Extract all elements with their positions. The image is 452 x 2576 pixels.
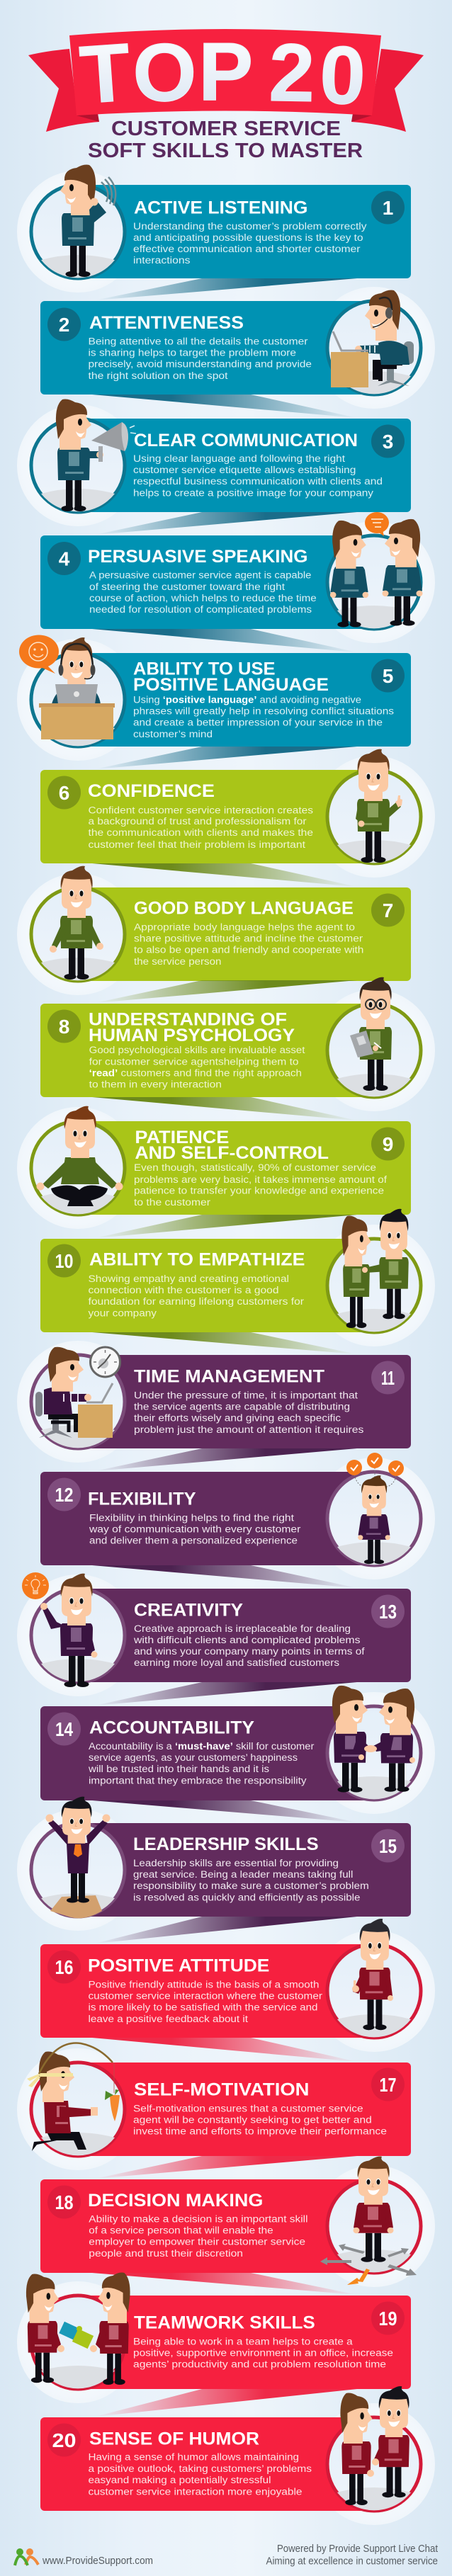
description: A persuasive customer service agent is capable [89, 570, 311, 581]
panel: 10 empathize [40, 1209, 435, 1346]
illustration: man with options [327, 1453, 421, 1565]
heading: ATTENTIVENESS [89, 313, 244, 333]
heading: UNDERSTANDING OF [89, 1009, 287, 1029]
illustration: man with idea [22, 1572, 125, 1687]
panel: 13 creativity [17, 1572, 411, 1696]
description: employer to empower their customer service [89, 2237, 305, 2247]
number badge [47, 1477, 81, 1511]
description: your company [88, 1308, 157, 1319]
description: patience to transfer your knowledge and experience [134, 1186, 384, 1196]
heading: CREATIVITY [134, 1601, 243, 1621]
description: great service. Being a leader means taking full [133, 1869, 353, 1880]
panel: 4 persuasive speaking [40, 512, 435, 643]
panel: 17 self motivation [17, 2043, 411, 2170]
description: Good psychological skills are invaluable asset [89, 1045, 305, 1055]
number badge: 13 [379, 1601, 397, 1623]
description [133, 221, 367, 266]
number badge: 20 [52, 2429, 77, 2451]
heading: ABILITY TO USE [133, 659, 275, 679]
description: is more likely to be satisfied with the service and [88, 2002, 318, 2013]
illustration: open arms man [31, 866, 125, 981]
description: will be trusted into their hands and it is [88, 1764, 269, 1774]
number badge [47, 1244, 81, 1278]
heading: ACCOUNTABILITY [89, 1718, 254, 1737]
carrot [105, 2089, 120, 2121]
description: helps to create a positive image for your company [133, 488, 373, 499]
number badge: 5 [383, 665, 393, 687]
description: Creative approach is irreplaceable for dealing [134, 1623, 351, 1634]
number badge [371, 425, 405, 458]
number badge [371, 2302, 405, 2334]
description [89, 570, 317, 615]
ribbon fold left [77, 113, 99, 122]
illustration: man with megaphone [31, 399, 136, 512]
arrow: connector 5 to 6 [95, 747, 357, 769]
illustration: meditating man [31, 1106, 125, 1215]
description: ‘read’ customers and find the right approach [89, 1067, 302, 1078]
number badge: 19 [378, 2308, 397, 2330]
description: is sharing helps to target the problem more [88, 348, 296, 358]
footer logo [15, 2548, 38, 2565]
heading: SENSE OF HUMOR [89, 2429, 259, 2449]
heading: FLEXIBILITY [88, 1490, 196, 1509]
description: Being attentive to all the details the customer [88, 336, 308, 347]
description: with difficult clients and complicated problems [133, 1635, 361, 1645]
check icons [346, 1453, 404, 1476]
description: Ability to make a decision is an important skill [89, 2214, 308, 2225]
description: and anticipating possible questions is the key to [133, 232, 363, 243]
arrow: connector 1 to 2 [95, 278, 357, 300]
illustration: two people talking [327, 512, 422, 629]
illustration: thumbs up man [327, 1919, 421, 2038]
number badge: 15 [379, 1835, 397, 1857]
arrow: connector 13 to 14 [95, 1682, 357, 1706]
footer credit: Powered by Provide Support Live Chat [277, 2543, 438, 2555]
description: positive, supportive environment in an office, increase [133, 2348, 393, 2359]
arrow: connector 10 to 11 [92, 1332, 357, 1354]
heading: ACTIVE LISTENING [134, 198, 307, 218]
footer credit [266, 2543, 438, 2567]
description: and wins your company many points in terms of [134, 1646, 365, 1657]
number badge [47, 776, 81, 809]
panel: 9 patience [17, 1106, 411, 1229]
panel: 14 accountability [40, 1686, 435, 1814]
description [134, 922, 363, 967]
description: Appropriate body language helps the agent to [134, 922, 355, 933]
description [89, 2214, 308, 2259]
arrow: connector 8 to 9 [92, 1097, 357, 1120]
number badge [47, 307, 81, 341]
description [133, 695, 394, 739]
description: Being able to work in a team helps to create a [133, 2337, 353, 2347]
description: a background of trust and professionalism for [88, 816, 307, 827]
clock [91, 1347, 120, 1377]
description: customer’s mind [133, 729, 213, 739]
arrow: connector 15 to 16 [95, 1917, 357, 1944]
footer credit: Aiming at excellence in customer service [266, 2555, 438, 2567]
description: service agents, as your customers’ happiness [89, 1752, 298, 1763]
description: the service person [134, 956, 221, 967]
panel: 1 active listening [17, 164, 411, 293]
arrow: connector 2 to 3 [92, 395, 357, 418]
illustration: man chasing carrot [27, 2043, 125, 2156]
arrow: connector 12 to 13 [92, 1565, 357, 1588]
description: customer feel that their problem is important [88, 839, 305, 850]
number badge [371, 191, 405, 224]
panel: 5 positive language [17, 635, 411, 761]
heading: TEAMWORK SKILLS [134, 2313, 315, 2333]
number badge: 3 [383, 431, 393, 453]
number badge: 2 [59, 314, 69, 336]
description: of a service person that will enable the [89, 2225, 273, 2236]
number badge: 11 [381, 1367, 395, 1389]
description: precisely, avoid misunderstanding and provide [88, 359, 312, 370]
number badge [371, 894, 405, 926]
illustration: two men laughing [327, 2386, 421, 2511]
description: Positive friendly attitude is the basis of a smooth [88, 1980, 319, 1990]
panel: 19 teamwork skills [17, 2272, 411, 2403]
subtitle: SOFT SKILLS TO MASTER [88, 140, 363, 162]
panel: 8 human psychology [40, 977, 435, 1111]
number badge: 16 [55, 1956, 74, 1978]
description: Showing empathy and creating emotional [88, 1273, 289, 1284]
description [88, 1273, 305, 1319]
heading: PERSUASIVE SPEAKING [88, 547, 307, 567]
heading: LEADERSHIP SKILLS [133, 1834, 319, 1854]
heading: CLEAR COMMUNICATION [134, 431, 358, 450]
number badge: 12 [55, 1484, 74, 1506]
number badge: 8 [59, 1016, 69, 1038]
puzzle pieces [59, 2322, 94, 2349]
description [89, 1045, 305, 1090]
description: earning more loyal and satisfied customers [134, 1657, 339, 1668]
description [88, 1741, 315, 1786]
description: their efforts wisely and giving each specific [134, 1413, 341, 1424]
description: people and trust their discretion [89, 2248, 243, 2259]
description: Accountability is a ‘must-have’ skill for customer [89, 1741, 315, 1752]
heading line 2: POSITIVE LANGUAGE [133, 675, 329, 695]
heading: SELF-MOTIVATION [134, 2079, 309, 2099]
description: customer service interaction where the customer [88, 1991, 323, 2002]
description [133, 453, 383, 499]
description: the service agents are capable of distributing [134, 1402, 350, 1412]
description: Flexibility in thinking helps to find the right [89, 1512, 294, 1523]
heading: ABILITY TO EMPATHIZE [89, 1250, 305, 1270]
footer website: www.ProvideSupport.com [42, 2555, 153, 2567]
panel: 2 attentiveness [40, 287, 435, 409]
illustration: two friends [327, 1209, 421, 1332]
illustration: leader on box [31, 1797, 125, 1918]
description [133, 2337, 393, 2370]
arrow: connector 3 to 4 [95, 512, 357, 535]
title banner [28, 25, 424, 132]
illustration: listening man [31, 164, 125, 278]
description: interactions [133, 255, 191, 266]
panel: 16 positive attitude [40, 1919, 435, 2052]
number badge: 14 [55, 1718, 73, 1740]
arrow: connector 18 to 19 [92, 2273, 357, 2295]
arrow: connector 19 to 20 [95, 2389, 357, 2417]
description [88, 1980, 323, 2024]
description: important that they embrace the responsibility [89, 1775, 307, 1786]
arrow: connector 9 to 10 [95, 1215, 357, 1238]
description: share positive attitude and incline the customer [134, 934, 363, 944]
subtitle [88, 118, 363, 162]
number badge [371, 659, 405, 693]
illustration: two men with puzzle [26, 2272, 130, 2389]
description [134, 1162, 387, 1208]
number badge [47, 2186, 81, 2218]
description: Understanding the customer’s problem correctly [133, 221, 367, 232]
smiley bubble [19, 635, 59, 674]
illustration: agent at desk [327, 290, 421, 395]
description: foundation for earning lifelong customers for [88, 1296, 305, 1307]
number badge: 17 [380, 2074, 397, 2096]
description: of steering the customer toward the right [89, 581, 285, 592]
description: Confident customer service interaction creates [88, 805, 313, 815]
illustration: man at laptop with clock [31, 1347, 125, 1448]
description: a positive outlook, taking customers’ problems [88, 2463, 312, 2474]
description: to the customer [134, 1197, 211, 1208]
description [88, 336, 312, 381]
subtitle: CUSTOMER SERVICE [111, 118, 341, 140]
number badge: 4 [59, 548, 70, 569]
panel: 6 confidence [40, 749, 435, 878]
ribbon main [69, 29, 381, 115]
number badge [47, 1010, 81, 1043]
description: way of communication with every customer [89, 1524, 301, 1534]
description: for customer service agentshelping them to [89, 1056, 298, 1067]
arrow: connector 4 to 5 [92, 629, 357, 652]
description: the communication with clients and makes the [88, 827, 313, 838]
number badge: 7 [383, 900, 393, 921]
arrow: connector 17 to 18 [95, 2156, 357, 2179]
ribbon fold right [351, 113, 372, 122]
description: phrases will greatly help in resolving conflict situations [133, 706, 394, 717]
description: to them in every interaction [89, 1079, 222, 1090]
description: agents’ productivity and cut problem resolution time [133, 2359, 386, 2370]
description: customer service etiquette allows establishing [133, 465, 356, 475]
arrow: connector 14 to 15 [92, 1800, 357, 1822]
description: connection with the customer is a good [88, 1285, 279, 1295]
number badge [371, 1595, 405, 1628]
number badge: 18 [55, 2191, 74, 2213]
description: invest time and efforts to improve their performance [133, 2126, 387, 2136]
arrow: connector 6 to 7 [92, 863, 357, 887]
illustration: man with glasses and clipboard [327, 977, 421, 1097]
panel: 7 good body language [17, 866, 411, 995]
arrow: connector 11 to 12 [95, 1448, 357, 1471]
heading line 2: HUMAN PSYCHOLOGY [89, 1026, 295, 1045]
description: course of action, which helps to reduce the time [89, 593, 317, 603]
number badge [371, 1128, 405, 1160]
heading: DECISION MAKING [88, 2191, 263, 2211]
description: problems are very basic, it takes immense amount of [134, 1174, 387, 1185]
arrow: connector 16 to 17 [92, 2038, 357, 2062]
heading: CONFIDENCE [88, 781, 215, 801]
number badge [371, 1361, 405, 1394]
number badge: 10 [55, 1250, 74, 1272]
number badge: 6 [59, 782, 69, 804]
description: easyand making a potentially stressful [88, 2475, 271, 2485]
description: leave a positive feedback about it [88, 2014, 248, 2024]
ribbon left tail [28, 49, 99, 132]
description: and create a better impression of your service in the [133, 717, 383, 728]
description [134, 1390, 364, 1435]
number badge [371, 1829, 405, 1863]
number badge: 9 [383, 1133, 393, 1155]
description: needed for resolution of complicated problems [89, 604, 312, 615]
panel: 20 sense of humor [40, 2386, 435, 2525]
description: and deliver them a personalized experience [89, 1535, 298, 1545]
number badge [371, 2068, 405, 2101]
illustration: confident man [327, 749, 421, 863]
number badge [47, 1951, 81, 1983]
description: Using clear language and following the right [133, 453, 345, 464]
speech bubble [365, 512, 389, 536]
panel: 15 leadership skills [17, 1797, 411, 1931]
fishing rod [39, 2043, 113, 2074]
heading line 2: AND SELF-CONTROL [135, 1143, 329, 1163]
arrow: connector 7 to 8 [95, 980, 357, 1003]
number badge [47, 1713, 81, 1745]
panel: 11 time management [17, 1341, 411, 1463]
heading: PATIENCE [135, 1128, 229, 1147]
panel: 18 decision making [40, 2157, 435, 2287]
description: customer service interaction more enjoyable [88, 2486, 302, 2497]
description: Leadership skills are essential for providing [133, 1858, 339, 1868]
description: agent will be constantly seeking to get better and [133, 2114, 372, 2125]
description: respectful business communication with clients and [133, 476, 383, 487]
description: problem just the amount of attention it requires [134, 1424, 364, 1435]
illustration: handshake [327, 1686, 421, 1800]
description: responsibility to make sure a customer’s problem [133, 1880, 369, 1891]
description: to also be open and friendly and cooperate with [134, 945, 363, 955]
description: is resolved as quickly and efficiently as possible [133, 1892, 360, 1902]
description [88, 805, 313, 850]
description [133, 1623, 365, 1668]
description [133, 2103, 387, 2136]
heading: POSITIVE ATTITUDE [88, 1956, 269, 1975]
title text: TOP 20 [77, 25, 367, 122]
direction arrows [320, 2244, 417, 2285]
panel: 12 flexibility [40, 1453, 435, 1579]
panel: 3 clear communication [17, 399, 411, 526]
description: Using ‘positive language’ and avoiding negative [133, 695, 361, 705]
description: Under the pressure of time, it is important that [134, 1390, 358, 1401]
number badge [47, 2424, 81, 2456]
description: effective communication and shorter customer [133, 244, 361, 254]
number badge [47, 542, 81, 575]
description [133, 1858, 369, 1902]
bulb icon [22, 1572, 49, 1599]
number badge: 1 [383, 197, 393, 219]
description [89, 1512, 301, 1545]
description [88, 2452, 312, 2497]
ribbon right tail [351, 49, 424, 132]
illustration: headset agent with laptop [19, 635, 125, 747]
description: Even though, statistically, 90% of customer service [134, 1162, 376, 1173]
description: the right solution on the spot [88, 370, 228, 381]
heading: GOOD BODY LANGUAGE [134, 899, 354, 919]
description: Having a sense of humor allows maintaining [88, 2452, 299, 2463]
heading: TIME MANAGEMENT [134, 1367, 324, 1387]
illustration: man at crossroads [320, 2157, 421, 2285]
description: Self-motivation ensures that a customer service [133, 2103, 363, 2113]
